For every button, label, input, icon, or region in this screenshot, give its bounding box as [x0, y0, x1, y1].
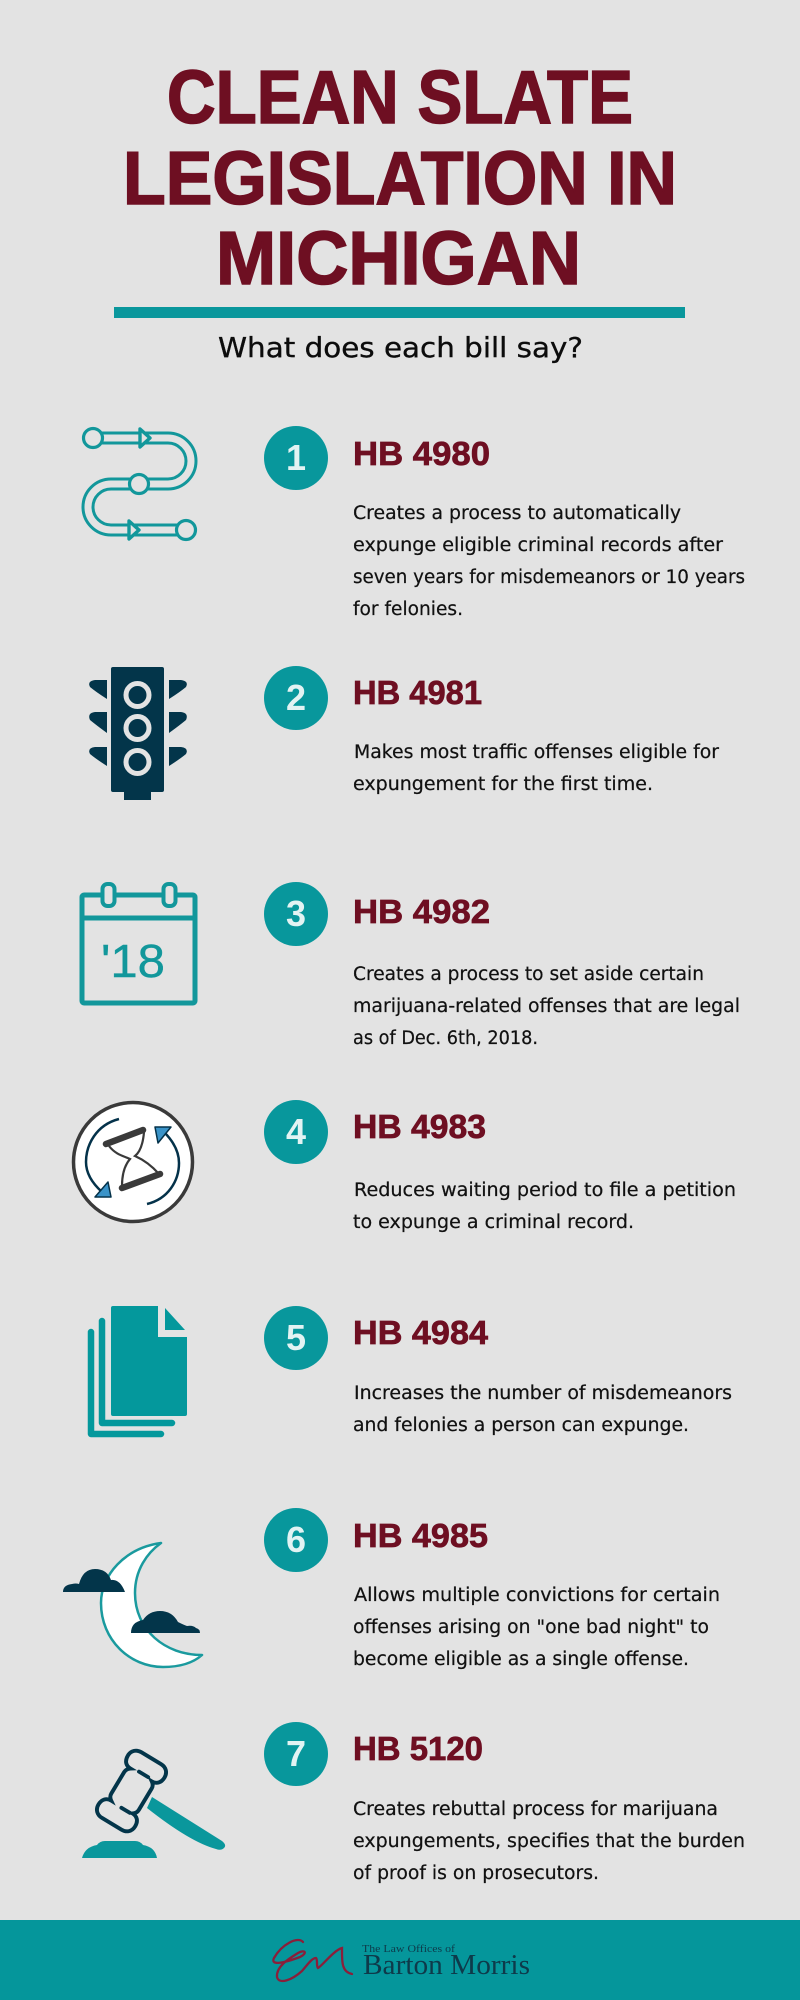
title — [123, 55, 677, 300]
number badge 7: 7 — [286, 1733, 306, 1774]
icon: crescent moon and clouds — [63, 1543, 202, 1667]
icon: hourglass with rotating arrows — [74, 1102, 192, 1222]
description: Allows multiple convictions for certain — [354, 1585, 720, 1606]
logo: firm name: Barton Morris — [363, 1950, 530, 1981]
description — [353, 964, 740, 1049]
subtitle: What does each bill say? — [218, 332, 583, 364]
description: and felonies a person can expunge. — [353, 1415, 689, 1436]
number badge 5 — [264, 1306, 328, 1370]
number badge 6: 6 — [286, 1519, 306, 1560]
icon: gavel — [82, 1747, 225, 1858]
icon: calendar 2018 — [82, 884, 195, 1003]
description: Creates rebuttal process for marijuana — [353, 1799, 718, 1820]
panel: HB 4985 — [63, 1508, 720, 1670]
description: expunge eligible criminal records after — [353, 535, 724, 556]
description: marijuana-related offenses that are legal — [353, 996, 740, 1017]
panel: HB 4984 — [91, 1306, 732, 1436]
description — [353, 1799, 745, 1884]
number badge 1 — [264, 426, 328, 490]
number badge 7 — [264, 1722, 328, 1786]
icon: calendar 2018: '18 — [101, 935, 165, 987]
title: LEGISLATION IN — [123, 136, 677, 220]
panel: HB 4982 — [82, 882, 740, 1049]
icon: winding road — [84, 428, 196, 540]
description: offenses arising on "one bad night" to — [353, 1617, 709, 1638]
description: Reduces waiting period to file a petition — [354, 1180, 736, 1201]
description: Creates a process to set aside certain — [353, 964, 704, 985]
heading: HB 4984 — [353, 1315, 488, 1352]
footer band — [0, 1920, 800, 2000]
description: expungement for the first time. — [353, 774, 653, 795]
number badge 1: 1 — [286, 437, 306, 478]
description: become eligible as a single offense. — [353, 1649, 689, 1670]
description — [353, 742, 720, 795]
number badge 3 — [264, 882, 328, 946]
number badge 2 — [264, 666, 328, 730]
title underline bar — [114, 307, 685, 318]
panel: HB 4980 — [84, 426, 745, 620]
heading: HB 4983 — [353, 1109, 486, 1146]
number badge 4: 4 — [286, 1111, 306, 1152]
description: of proof is on prosecutors. — [353, 1863, 599, 1884]
description — [353, 1383, 732, 1436]
description: Increases the number of misdemeanors — [354, 1383, 732, 1404]
panel: HB 5120 — [82, 1722, 745, 1884]
icon: stacked documents — [91, 1306, 187, 1434]
description: Makes most traffic offenses eligible for — [354, 742, 720, 763]
description: to expunge a criminal record. — [353, 1212, 634, 1233]
number badge 3: 3 — [286, 893, 306, 934]
description: seven years for misdemeanors or 10 years — [353, 567, 745, 588]
heading: HB 4980 — [353, 436, 490, 473]
title: MICHIGAN — [216, 216, 581, 300]
description: for felonies. — [353, 599, 463, 620]
title: CLEAN SLATE — [167, 55, 633, 139]
icon: traffic light — [89, 667, 187, 800]
number badge 5: 5 — [286, 1317, 306, 1358]
number badge 2: 2 — [286, 677, 306, 718]
number badge 4 — [264, 1100, 328, 1164]
description: expungements, specifies that the burden — [353, 1831, 745, 1852]
description — [353, 503, 745, 620]
heading: HB 4985 — [353, 1518, 488, 1555]
panel: HB 4981 — [89, 666, 720, 800]
description — [353, 1180, 736, 1233]
heading: HB 4981 — [353, 675, 482, 712]
panel: HB 4983 — [74, 1100, 736, 1233]
description: Creates a process to automatically — [353, 503, 681, 524]
heading: HB 4982 — [353, 894, 490, 931]
logo: signature — [273, 1940, 352, 1981]
logo: firm name: The Law Offices of — [362, 1943, 455, 1955]
heading: HB 5120 — [353, 1731, 483, 1768]
description — [353, 1585, 720, 1670]
number badge 6 — [264, 1508, 328, 1572]
description: as of Dec. 6th, 2018. — [353, 1028, 538, 1049]
